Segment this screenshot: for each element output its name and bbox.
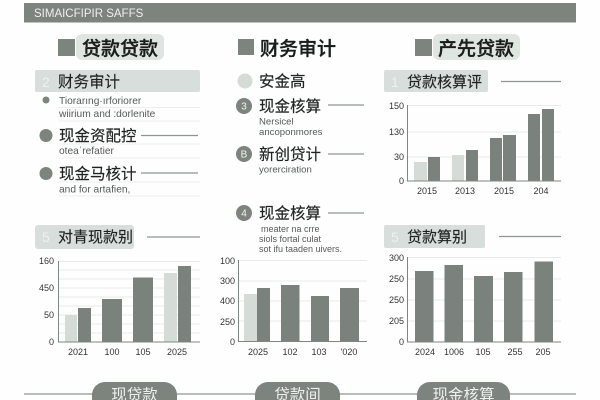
header banner: SIMAICFIPIR SAFFS bbox=[34, 8, 144, 20]
bar chart: bottom right: 250 bbox=[389, 274, 404, 284]
bar chart: top right: 2015 bbox=[417, 186, 437, 196]
list item: 3 现金核算: ancoponmores bbox=[259, 127, 323, 138]
bar chart: left: 0 bbox=[49, 337, 54, 347]
bar chart: bottom right: 105 bbox=[475, 347, 491, 357]
bar chart: middle: '020 bbox=[341, 347, 357, 357]
panel: left column bbox=[35, 34, 200, 357]
bar chart: left: 450 bbox=[39, 283, 54, 293]
bar chart: left: 100 bbox=[104, 347, 120, 357]
list item: B 新创贷计: 新创贷计 bbox=[259, 146, 321, 164]
bar chart: left: 50 bbox=[44, 310, 54, 320]
bar chart: left bbox=[39, 256, 200, 357]
right heading: 产先贷款 bbox=[438, 38, 514, 60]
list item: small bullet text: Tiorarıng·ırforiorer bbox=[59, 96, 142, 107]
list item: 现金资配控: oteaˈrefatier bbox=[59, 146, 115, 157]
bar chart: top right: 30 bbox=[394, 152, 404, 162]
left heading bbox=[58, 34, 164, 60]
list item: B 新创贷计 bbox=[236, 146, 364, 176]
footer tab: 现贷款 bbox=[92, 382, 177, 400]
bar chart: middle bbox=[220, 256, 367, 357]
section bar: 财务审计 bbox=[35, 70, 200, 92]
list item: small bullet text: wiirium and :dorlenite bbox=[58, 109, 156, 120]
panel: right column bbox=[384, 34, 561, 357]
bar chart: left: 160 bbox=[39, 256, 54, 266]
section bar: 财务审计: 2 bbox=[42, 74, 50, 90]
list item: 4 现金核算: meater na crre bbox=[261, 224, 320, 234]
bar chart: bottom right: 255 bbox=[507, 347, 523, 357]
bar chart: top right: 130 bbox=[389, 127, 404, 137]
left heading: 贷款贷款 bbox=[82, 38, 158, 60]
bar chart: middle: 100 bbox=[220, 256, 235, 266]
bar chart: top right: 0 bbox=[399, 176, 404, 186]
list item: 4 现金核算: 4 bbox=[241, 208, 247, 220]
list item: 3 现金核算 bbox=[236, 96, 364, 138]
bar chart: top right: 2015 bbox=[494, 186, 514, 196]
bar chart: top right bbox=[389, 101, 561, 196]
section pill: 对青现款别: 对青现款别 bbox=[58, 229, 133, 246]
panel: middle column bbox=[220, 38, 367, 357]
list item: B 新创贷计: yorerciration bbox=[259, 164, 312, 176]
list item: 现金资配控 bbox=[40, 127, 200, 158]
list item: 现金马核计: and for artafien, bbox=[59, 184, 130, 196]
list item: 4 现金核算: sot ifu taaden uivers. bbox=[259, 244, 342, 254]
section pill: 对青现款别 bbox=[35, 225, 200, 249]
section pill: 贷款核算评: 1 bbox=[391, 74, 399, 90]
section pill: 贷款算别 bbox=[384, 225, 561, 248]
list item: 3 现金核算: 现金核算 bbox=[259, 96, 321, 116]
bar chart: bottom right: 2024 bbox=[415, 347, 435, 357]
bar chart: bottom right: 205 bbox=[389, 316, 404, 326]
list item: small bullet text bbox=[42, 96, 200, 121]
list item: 3 现金核算: 3 bbox=[241, 102, 247, 112]
section pill: 贷款算别: 贷款算别 bbox=[407, 228, 467, 246]
section pill: 对青现款别: 5 bbox=[42, 229, 50, 245]
list item: 3 现金核算: Nersicel bbox=[259, 116, 294, 128]
bar chart: middle: 102 bbox=[282, 347, 298, 357]
right heading bbox=[415, 34, 520, 60]
bar chart: top right: 150 bbox=[389, 101, 404, 111]
list item: 安金高 bbox=[238, 72, 306, 90]
section pill: 贷款算别: 5 bbox=[391, 229, 399, 245]
header banner bbox=[24, 3, 576, 22]
bar chart: middle: 0 bbox=[230, 337, 235, 347]
section pill: 贷款核算评: 贷款核算评 bbox=[407, 73, 482, 91]
bar chart: bottom right: 250 bbox=[389, 295, 404, 305]
section bar: 财务审计: 财务审计 bbox=[58, 73, 120, 91]
bar chart: left: 105 bbox=[135, 347, 151, 357]
list item: 现金资配控: 现金资配控 bbox=[59, 127, 137, 145]
list item: 4 现金核算 bbox=[236, 204, 364, 254]
footer: divider with tabs bbox=[24, 382, 576, 400]
bar chart: top right: 204 bbox=[533, 186, 549, 196]
bar chart: middle: 300 bbox=[220, 276, 235, 286]
footer tab: 现金核算 bbox=[417, 382, 510, 400]
footer tab: 贷款间 bbox=[255, 382, 340, 400]
section pill: 贷款核算评 bbox=[384, 70, 561, 92]
bar chart: left: 2021 bbox=[68, 347, 88, 357]
list item: 4 现金核算: siols fortal culat bbox=[259, 234, 322, 244]
middle heading: 财务审计 bbox=[260, 38, 336, 60]
bar chart: bottom right: 1006 bbox=[444, 347, 464, 357]
bar chart: middle: 103 bbox=[311, 347, 327, 357]
bar chart: middle: 2025 bbox=[248, 347, 268, 357]
list item: 现金马核计: 现金马核计 bbox=[59, 165, 137, 183]
bar chart: middle: 250 bbox=[220, 317, 235, 327]
bar chart: bottom right: 0 bbox=[399, 337, 404, 347]
bar chart: bottom right bbox=[389, 253, 561, 357]
bar chart: top right: 2013 bbox=[455, 186, 475, 196]
bar chart: middle: 400 bbox=[220, 296, 235, 306]
list item: 4 现金核算: 现金核算 bbox=[259, 204, 321, 222]
list item: B 新创贷计: B bbox=[241, 150, 248, 160]
list item: 安金高: 安金高 bbox=[259, 72, 306, 90]
bar chart: bottom right: 205 bbox=[535, 347, 551, 357]
bar chart: left: 2025 bbox=[167, 347, 187, 357]
list item: 现金马核计 bbox=[40, 165, 200, 196]
bar chart: bottom right: 300 bbox=[389, 253, 404, 263]
